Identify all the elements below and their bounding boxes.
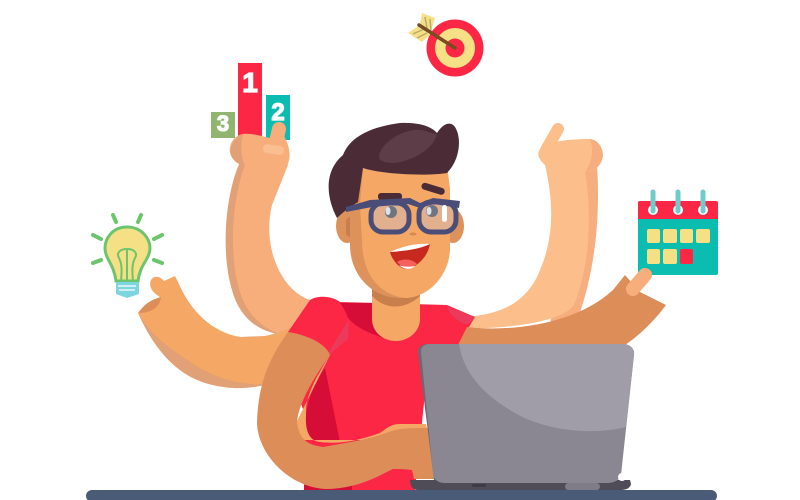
glasses — [346, 198, 460, 232]
icon: target with arrow — [408, 13, 484, 76]
icon: light bulb — [93, 215, 162, 298]
icon: calendar — [638, 192, 718, 275]
icon: ranking podium: 1 — [242, 67, 258, 98]
icon: ranking podium: 3 — [217, 111, 229, 136]
head — [329, 123, 464, 298]
nose — [410, 232, 416, 236]
front arm — [257, 332, 434, 489]
face — [350, 160, 450, 298]
left raised arm — [226, 129, 310, 335]
icon: ranking podium: 2 — [271, 99, 285, 126]
ears — [336, 209, 464, 243]
torso: red t-shirt — [286, 297, 475, 491]
left lower arm — [138, 276, 292, 388]
hair — [329, 123, 459, 218]
neck — [372, 285, 420, 341]
icon: ranking podium — [211, 63, 290, 143]
laptop — [410, 344, 634, 490]
mouth — [390, 244, 430, 269]
eyebrows — [378, 193, 402, 200]
right lower arm holding calendar — [458, 275, 666, 345]
right raised arm — [455, 129, 603, 328]
desk — [86, 490, 717, 500]
